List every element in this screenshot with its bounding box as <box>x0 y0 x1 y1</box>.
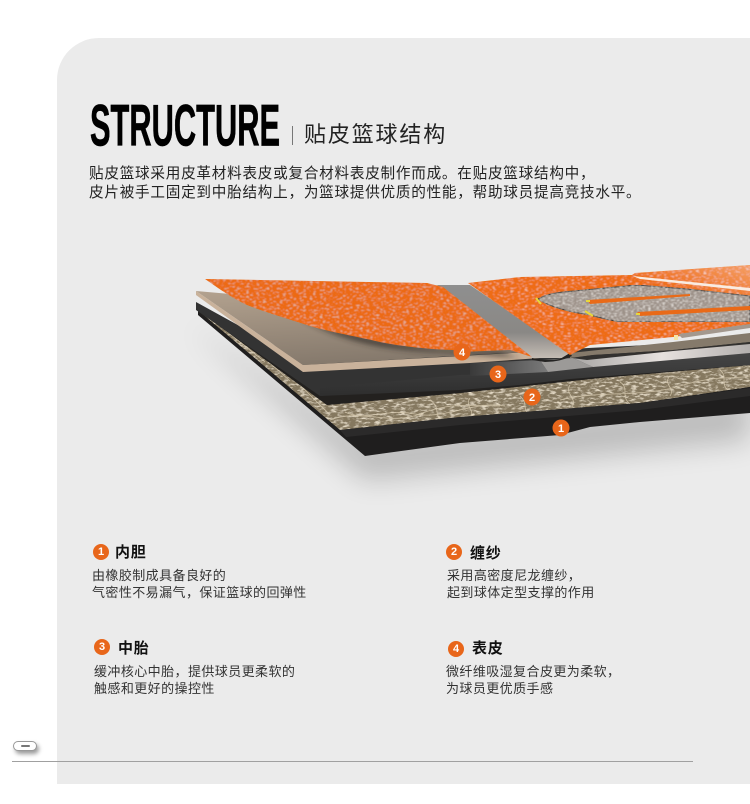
item 3: middle layer <box>94 639 295 696</box>
white seam line <box>633 276 750 291</box>
description 3: 触感和更好的操控性 <box>94 681 215 696</box>
layer 1: black inner bladder <box>198 309 750 456</box>
grey center stripe <box>437 285 572 362</box>
grey panel with orange finger lines <box>536 285 750 340</box>
layer 2: nylon winding fibre <box>200 312 750 430</box>
number marker 4: 4 <box>459 347 466 359</box>
badge 2 <box>446 544 462 560</box>
heading 3: 中胎 <box>118 640 150 657</box>
number marker 1 <box>552 420 570 436</box>
intro text block: 贴皮篮球采用皮革材料表皮或复合材料表皮制作而成。在贴皮篮球结构中， <box>89 166 595 182</box>
badge 1 <box>93 544 109 560</box>
bottom rule <box>12 761 693 762</box>
heading 2: 缠纱 <box>470 545 502 562</box>
badge 4 <box>448 641 464 657</box>
number marker 4 <box>454 344 470 360</box>
layer 3: dark cushion layer <box>196 302 750 396</box>
description 3 <box>94 664 295 696</box>
stack drop shadow <box>190 325 750 480</box>
item 1: inner bladder <box>92 544 307 600</box>
heading 4: 表皮 <box>472 640 504 657</box>
description 4 <box>446 664 620 696</box>
number marker 2: 2 <box>529 392 535 404</box>
item 2: winding yarn <box>446 544 595 600</box>
description 1: 气密性不易漏气，保证篮球的回弹性 <box>92 585 307 600</box>
description 3: 缓冲核心中胎，提供球员更柔软的 <box>94 664 295 679</box>
badge 4: 4 <box>453 643 459 655</box>
number marker 3: 3 <box>495 369 501 381</box>
description 1: 由橡胶制成具备良好的 <box>92 568 226 583</box>
number marker 1: 1 <box>558 423 564 435</box>
intro text block: 皮片被手工固定到中胎结构上，为篮球提供优质的性能，帮助球员提高竞技水平。 <box>89 185 641 201</box>
number marker 3 <box>490 366 506 382</box>
heading 1: 内胆 <box>115 544 147 561</box>
intro text block <box>89 165 641 201</box>
badge 3: 3 <box>99 641 105 653</box>
badge 1: 1 <box>98 546 104 558</box>
illustration: layered structure of the ball <box>196 265 750 490</box>
description 4: 微纤维吸湿复合皮更为柔软， <box>446 664 620 679</box>
badge 2: 2 <box>451 546 457 558</box>
description 2: 起到球体定型支撑的作用 <box>447 585 595 600</box>
shadow between cushion and fibre <box>198 308 750 408</box>
subtitle: 贴皮篮球结构 <box>304 122 447 147</box>
number marker 2 <box>524 388 540 406</box>
orange skin right of the stripe <box>468 265 750 355</box>
title divider <box>292 126 293 145</box>
item 4: skin <box>446 640 620 696</box>
shadow under the peeled skin <box>300 318 520 358</box>
description 2: 采用高密度尼龙缠纱， <box>447 568 581 583</box>
badge 3 <box>94 639 110 655</box>
peeled orange skin <box>205 279 532 357</box>
layer 4: tan backing sheet <box>196 291 750 372</box>
description 4: 为球员更优质手感 <box>446 681 553 696</box>
description 1 <box>92 568 307 600</box>
description 2 <box>447 568 595 600</box>
icon: pill inner dash <box>21 745 30 747</box>
icon: pill toggle <box>13 741 37 751</box>
